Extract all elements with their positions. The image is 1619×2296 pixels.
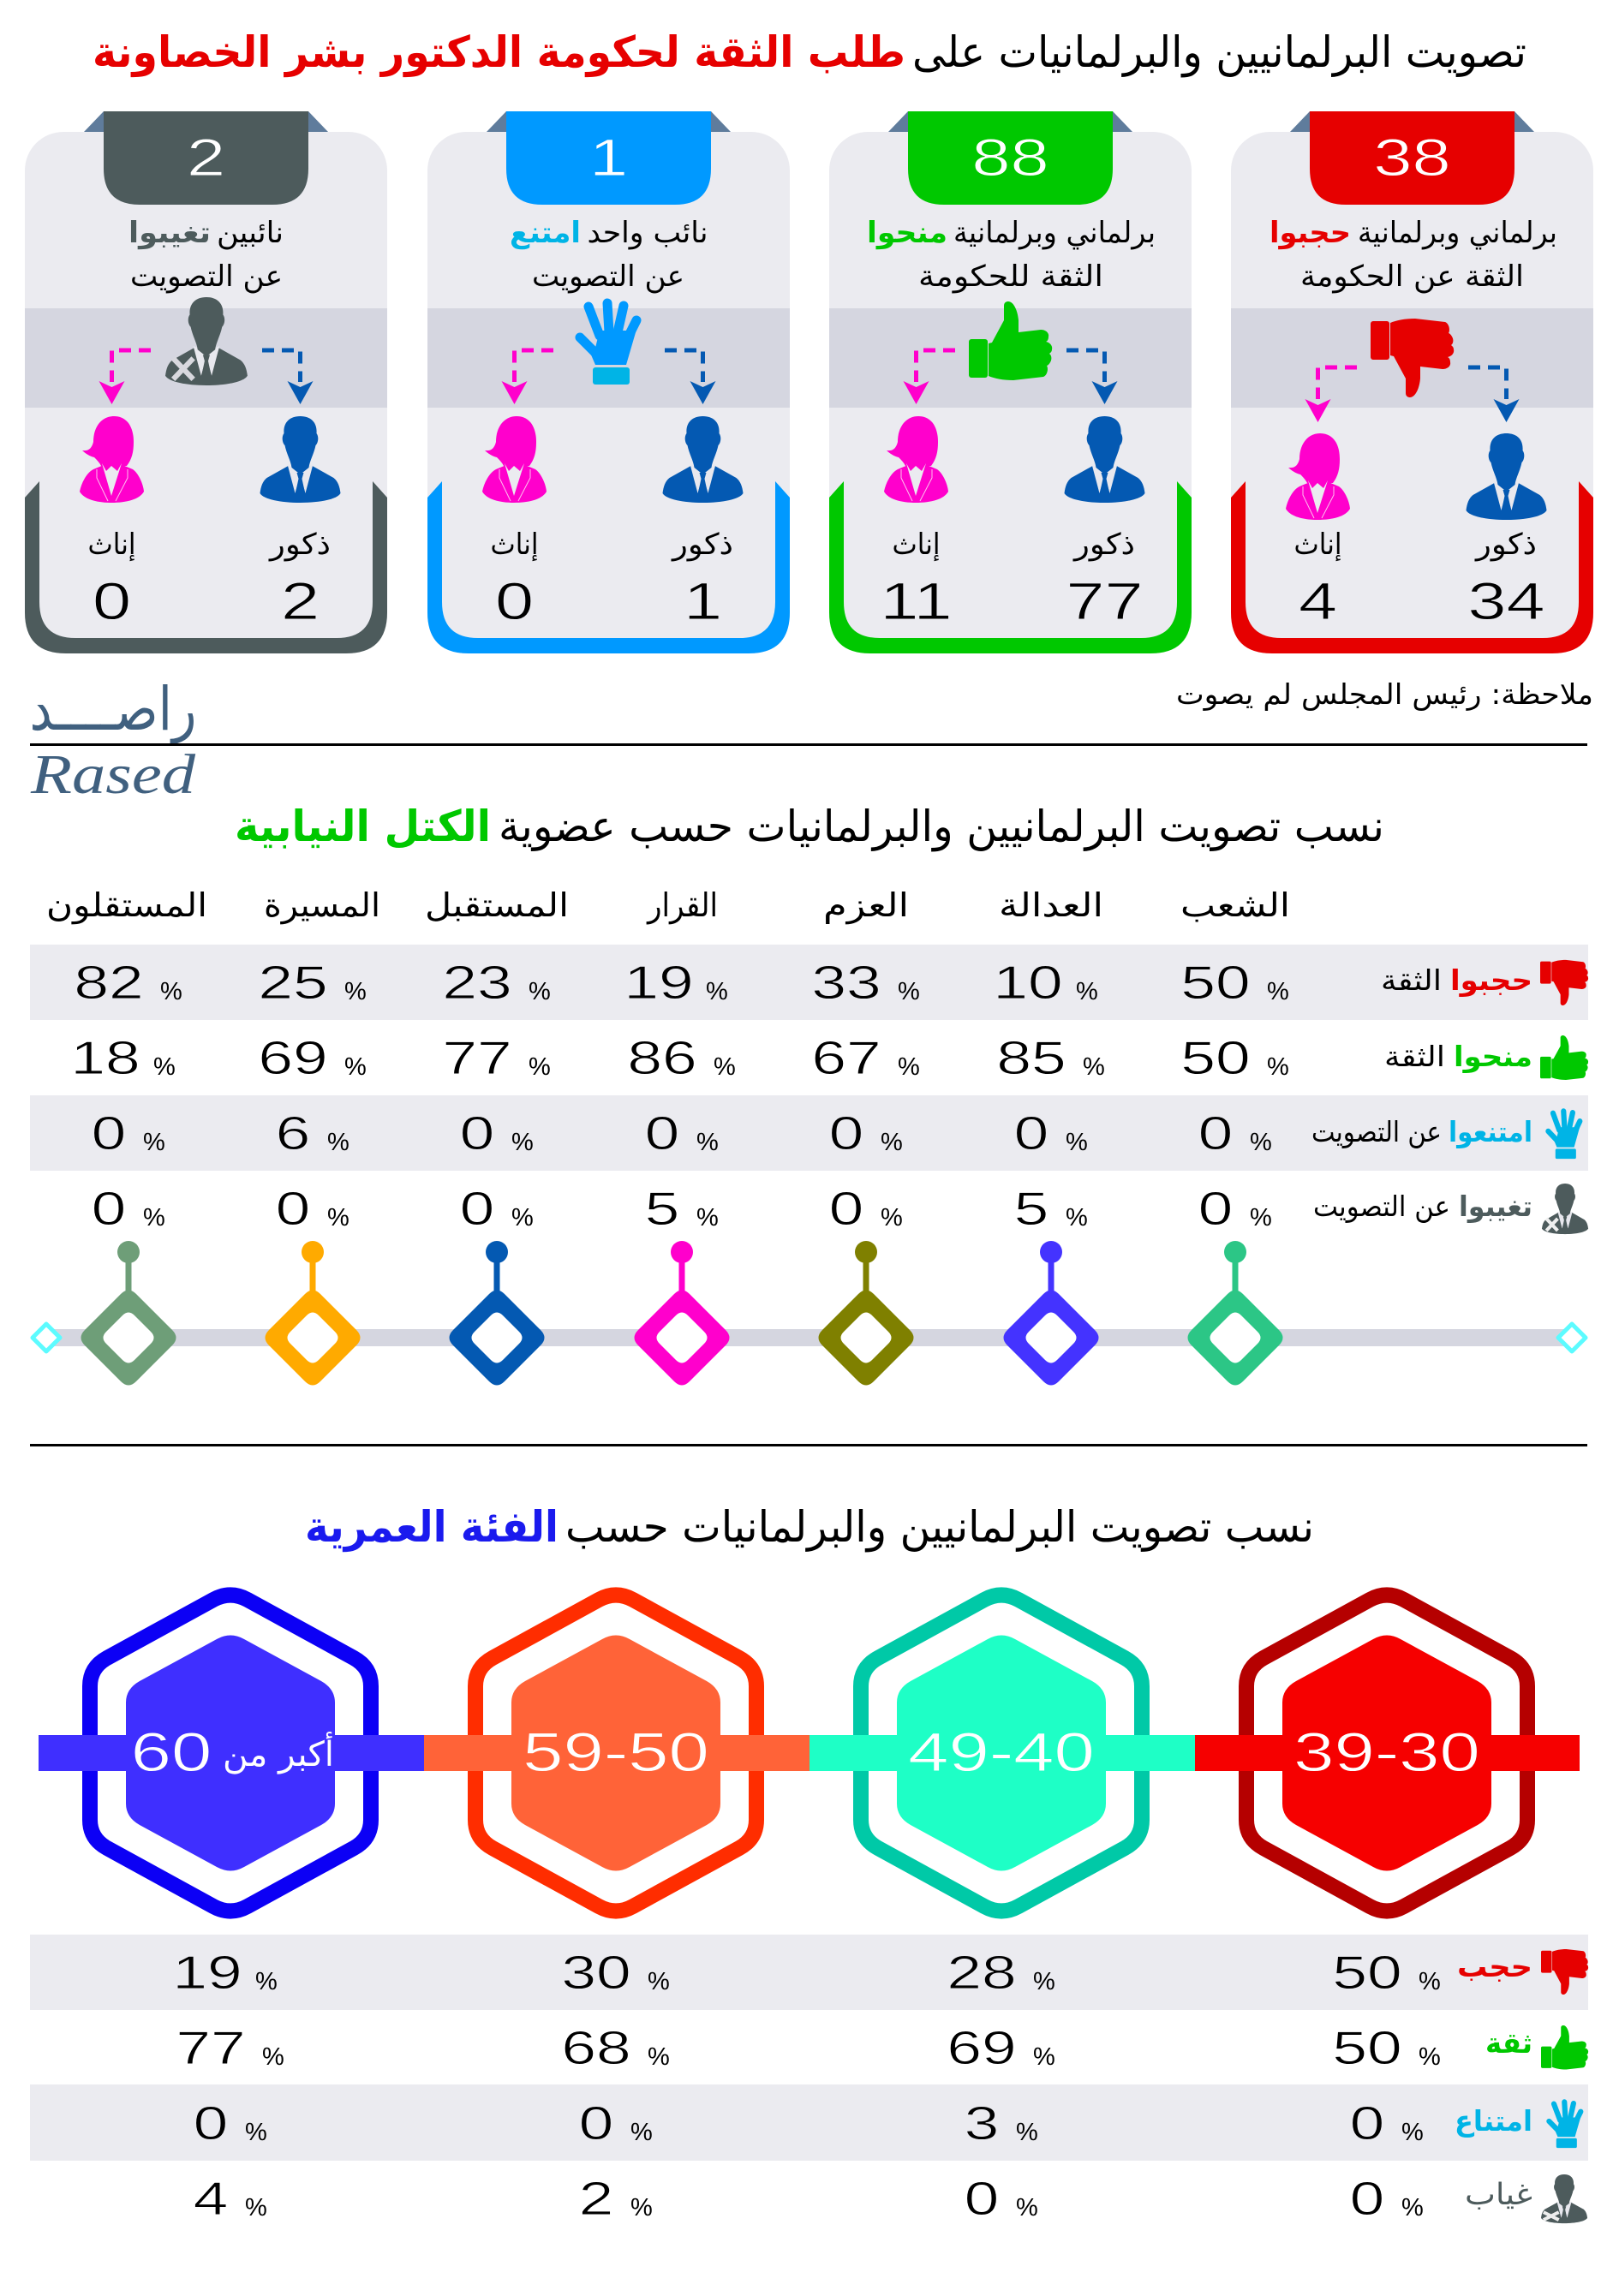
description text: عن التصويت — [532, 259, 684, 294]
table row: absent: % — [1250, 1204, 1272, 1231]
female count: 11 — [880, 573, 953, 631]
table row: withheld — [30, 945, 1588, 1020]
icon: raised hand — [1548, 1112, 1580, 1159]
male label: ذكور — [671, 528, 733, 562]
table row: abstained: % — [1066, 1129, 1088, 1156]
age table row: withheld: 28 — [947, 1946, 1017, 1999]
table row: withheld: 50 — [1180, 956, 1251, 1009]
timeline of bloc markers — [33, 1241, 1586, 1386]
table row: absent: عن التصويت — [1313, 1190, 1450, 1223]
table row: absent: 0 — [829, 1182, 863, 1235]
column headers: blocs: العزم — [823, 886, 909, 925]
column headers: blocs: الشعب — [1180, 886, 1290, 924]
table row: withheld: % — [706, 978, 728, 1005]
description text — [510, 216, 708, 294]
age table row: abstained: 0 — [579, 2096, 613, 2150]
table row: granted: الثقة — [1384, 1040, 1445, 1073]
age table row: abstained: % — [245, 2119, 267, 2146]
table row: granted: منحوا — [1454, 1040, 1532, 1074]
age table row: abstained: % — [1016, 2119, 1038, 2146]
age table row: granted: % — [1419, 2043, 1441, 2071]
table row: withheld: 82 — [74, 956, 144, 1009]
age table row: granted — [176, 2021, 1588, 2074]
male label: ذكور — [268, 528, 331, 562]
table row: granted: 50 — [1180, 1031, 1251, 1084]
table row: withheld: 19 — [624, 956, 694, 1009]
age table row: withheld: % — [648, 1968, 670, 1995]
description text: منحوا — [867, 216, 947, 250]
table row: absent: % — [1066, 1204, 1088, 1231]
icon: thumbs down — [1540, 960, 1588, 1005]
column headers: blocs — [46, 886, 1290, 925]
age table row: absent: % — [245, 2194, 267, 2221]
table row: withheld: % — [160, 978, 182, 1005]
age table row: absent: 4 — [194, 2172, 228, 2225]
age table row: abstained: 0 — [1350, 2096, 1384, 2150]
logo: Rased: Rased — [30, 743, 196, 806]
male count: 2 — [281, 573, 320, 631]
logo: Rased: راصــــد — [29, 674, 197, 744]
table row: abstained — [30, 1095, 1588, 1171]
description text: نائبين — [217, 216, 284, 250]
table row: withheld: % — [529, 978, 551, 1005]
description text: امتنع — [510, 216, 581, 250]
description text: حجبوا — [1270, 216, 1351, 250]
description text: برلماني وبرلمانية — [953, 216, 1156, 250]
icon: female — [884, 416, 948, 503]
table row: granted: 69 — [258, 1031, 328, 1084]
description text — [867, 216, 1156, 294]
column headers: blocs: المسيرة — [264, 886, 380, 925]
table row: withheld: 25 — [258, 956, 328, 1009]
icon: male — [663, 416, 744, 503]
age table row: abstained: % — [630, 2119, 653, 2146]
description text: الثقة للحكومة — [918, 259, 1103, 294]
table row: granted: % — [898, 1053, 920, 1081]
age table row: abstained: 0 — [194, 2096, 228, 2150]
arrow: to male — [1066, 350, 1117, 404]
table row: abstained: 0 — [1014, 1106, 1048, 1160]
hexagon: over 60: 60 — [131, 1721, 212, 1783]
arrow: to female — [1305, 367, 1357, 422]
age table row: absent: 2 — [579, 2172, 613, 2225]
table row: absent: 5 — [645, 1182, 679, 1235]
age table row: withheld: 50 — [1332, 1946, 1402, 1999]
age table row: granted: 69 — [947, 2021, 1017, 2074]
age table row: withheld: % — [255, 1968, 278, 1995]
icon: female — [80, 416, 144, 503]
table row: granted: % — [529, 1053, 551, 1081]
table row: abstained: 6 — [276, 1106, 310, 1160]
arrow: to female — [99, 350, 151, 404]
hexagon: 50-59: 59-50 — [523, 1721, 709, 1783]
description text: نائب واحد — [588, 216, 708, 250]
table row: absent: % — [511, 1204, 534, 1231]
icon: female — [1286, 433, 1350, 520]
table row: withheld: الثقة — [1381, 963, 1442, 997]
age table row: abstained: 3 — [965, 2096, 999, 2150]
table row: absent: % — [327, 1204, 349, 1231]
total count: 38 — [1373, 129, 1451, 188]
title: طلب الثقة لحكومة الدكتور بشر الخصاونة — [93, 27, 905, 78]
table row: absent: تغيبوا — [1459, 1190, 1532, 1224]
table row: granted: 86 — [627, 1031, 697, 1084]
age table row: absent: 0 — [965, 2172, 999, 2225]
hexagon: 50-59 — [424, 1595, 810, 1911]
column headers: blocs: القرار — [646, 886, 718, 925]
table row: granted: 85 — [996, 1031, 1066, 1084]
table row: abstained: امتنعوا — [1449, 1115, 1532, 1149]
total count: 2 — [187, 129, 225, 188]
table row: granted — [70, 1031, 1588, 1084]
table row: withheld: 10 — [993, 956, 1063, 1009]
description text — [128, 216, 284, 294]
male count: 77 — [1066, 573, 1144, 631]
table row: absent: 0 — [1198, 1182, 1233, 1235]
table row: withheld: % — [1267, 978, 1289, 1005]
icon: absent person — [165, 297, 248, 385]
panel: abstained, 1 — [427, 111, 790, 653]
age table row: withheld — [30, 1935, 1588, 2010]
table row: withheld: % — [344, 978, 367, 1005]
age table row: granted: % — [648, 2043, 670, 2071]
age table row: granted: ثقة — [1485, 2026, 1532, 2060]
age table row: withheld: حجب — [1457, 1950, 1532, 1983]
hexagon: over 60 — [39, 1595, 424, 1911]
female count: 0 — [93, 573, 131, 631]
table row: absent: % — [881, 1204, 903, 1231]
age table row: withheld: 30 — [561, 1946, 631, 1999]
hexagon: 30-39: 39-30 — [1293, 1721, 1480, 1783]
female label: إناث — [87, 528, 135, 562]
description text: الثقة عن الحكومة — [1300, 259, 1524, 294]
table row: withheld: حجبوا — [1450, 963, 1532, 998]
age table row: absent: % — [1016, 2194, 1038, 2221]
table row: abstained: 0 — [829, 1106, 863, 1160]
icon: thumbs up — [1541, 2025, 1588, 2070]
arrow: to male — [262, 350, 314, 404]
male count: 1 — [684, 573, 722, 631]
table row: abstained: % — [327, 1129, 349, 1156]
table row: abstained: 0 — [92, 1106, 126, 1160]
age table row: withheld: % — [1033, 1968, 1055, 1995]
hexagon: over 60: أكبر من — [223, 1732, 334, 1774]
table row: abstained: 0 — [1198, 1106, 1233, 1160]
female count: 4 — [1299, 573, 1337, 631]
panel: granted confidence, 88 — [829, 111, 1192, 653]
description text: برلماني وبرلمانية — [1358, 216, 1557, 250]
table row: granted: % — [153, 1053, 176, 1081]
female label: إناث — [1293, 528, 1341, 562]
age table row: absent: غياب — [1465, 2178, 1532, 2212]
table row: abstained: % — [696, 1129, 719, 1156]
table row: withheld: % — [898, 978, 920, 1005]
arrow: to female — [502, 350, 553, 404]
male label: ذكور — [1474, 528, 1537, 562]
column headers: blocs: المستقبل — [425, 886, 569, 924]
icon: absent person — [1542, 1184, 1588, 1234]
age table row: granted: 68 — [561, 2021, 631, 2074]
heading: by age group: نسب تصويت البرلمانيين والبرلمانيات حسب — [565, 1502, 1314, 1553]
icon: raised hand — [580, 303, 638, 385]
icon: male — [1467, 433, 1547, 520]
column headers: blocs: العدالة — [999, 886, 1103, 924]
icon: female — [482, 416, 547, 503]
heading: by parliamentary blocs: نسب تصويت البرلمانيين والبرلمانيات حسب عضوية — [499, 802, 1384, 852]
icon: thumbs down — [1541, 1949, 1588, 1995]
table row: granted: % — [1083, 1053, 1105, 1081]
column headers: blocs: المستقلون — [46, 886, 207, 925]
table row: granted: 18 — [70, 1031, 140, 1084]
age table row: granted: 77 — [176, 2021, 246, 2074]
age table row: abstained: % — [1401, 2119, 1424, 2146]
heading: by age group: الفئة العمرية — [305, 1502, 559, 1553]
female label: إناث — [893, 528, 941, 562]
hexagon: 40-49: 49-40 — [908, 1721, 1095, 1783]
table row: granted: 77 — [442, 1031, 512, 1084]
arrow: to female — [903, 350, 955, 404]
table row: abstained: % — [1250, 1129, 1272, 1156]
age table row: withheld: 19 — [172, 1946, 242, 1999]
arrow: to male — [665, 350, 716, 404]
description text: عن التصويت — [130, 259, 283, 294]
arrow: to male — [1468, 367, 1520, 422]
male label: ذكور — [1072, 528, 1135, 562]
female count: 0 — [495, 573, 534, 631]
table row: granted: 67 — [811, 1031, 881, 1084]
table row: absent: % — [696, 1204, 719, 1231]
heading: by parliamentary blocs: الكتل النيابية — [235, 802, 491, 851]
icon: thumbs down — [1371, 319, 1454, 397]
age table row: granted: 50 — [1332, 2021, 1402, 2074]
female label: إناث — [490, 528, 538, 562]
icon: absent person — [1541, 2174, 1587, 2223]
table row: granted: % — [1267, 1053, 1289, 1081]
table row: abstained: % — [143, 1129, 165, 1156]
panel: absent, 2 — [25, 111, 387, 653]
age hexagons — [39, 1595, 1580, 1911]
age table row: abstained: امتناع — [1455, 2104, 1532, 2138]
table row: withheld: % — [1076, 978, 1098, 1005]
table row: withheld: 23 — [442, 956, 512, 1009]
male count: 34 — [1467, 573, 1545, 631]
age table row: abstained — [30, 2084, 1588, 2161]
description text — [1270, 216, 1557, 294]
icon: thumbs up — [1540, 1035, 1588, 1080]
total count: 1 — [589, 129, 628, 188]
icon: male — [260, 416, 341, 503]
hexagon: 40-49 — [810, 1595, 1195, 1911]
total count: 88 — [971, 129, 1049, 188]
title — [93, 27, 1526, 78]
description text: تغيبوا — [128, 216, 211, 250]
table row: withheld: 33 — [811, 956, 881, 1009]
table row: granted: % — [714, 1053, 736, 1081]
table row: absent: 5 — [1014, 1182, 1048, 1235]
title: تصويت البرلمانيين والبرلمانيات على — [912, 27, 1526, 78]
table row: abstained: 0 — [460, 1106, 494, 1160]
age table row: withheld: % — [1419, 1968, 1441, 1995]
table row: granted: % — [344, 1053, 367, 1081]
logo: Rased — [29, 674, 1587, 806]
table row: abstained: % — [881, 1129, 903, 1156]
panel: withheld confidence, 38 — [1231, 111, 1593, 653]
hexagon: 30-39 — [1195, 1595, 1580, 1911]
age table row: granted: % — [1033, 2043, 1055, 2071]
table row: absent: 0 — [276, 1182, 310, 1235]
table row: abstained: عن التصويت — [1311, 1115, 1442, 1148]
icon: male — [1064, 416, 1144, 503]
table row: absent: 0 — [92, 1182, 126, 1235]
age table row: absent: % — [630, 2194, 653, 2221]
age table row: absent: % — [1401, 2194, 1424, 2221]
table row: abstained: % — [511, 1129, 534, 1156]
age table row: granted: % — [262, 2043, 284, 2071]
icon: thumbs up — [969, 301, 1052, 380]
note: ملاحظة: رئيس المجلس لم يصوت — [1176, 677, 1593, 711]
age table row: absent — [194, 2172, 1587, 2225]
table row: absent — [92, 1182, 1588, 1235]
table row: abstained: 0 — [645, 1106, 679, 1160]
age table row: absent: 0 — [1350, 2172, 1384, 2225]
table row: absent: % — [143, 1204, 165, 1231]
icon: raised hand — [1549, 2102, 1581, 2148]
table row: absent: 0 — [460, 1182, 494, 1235]
